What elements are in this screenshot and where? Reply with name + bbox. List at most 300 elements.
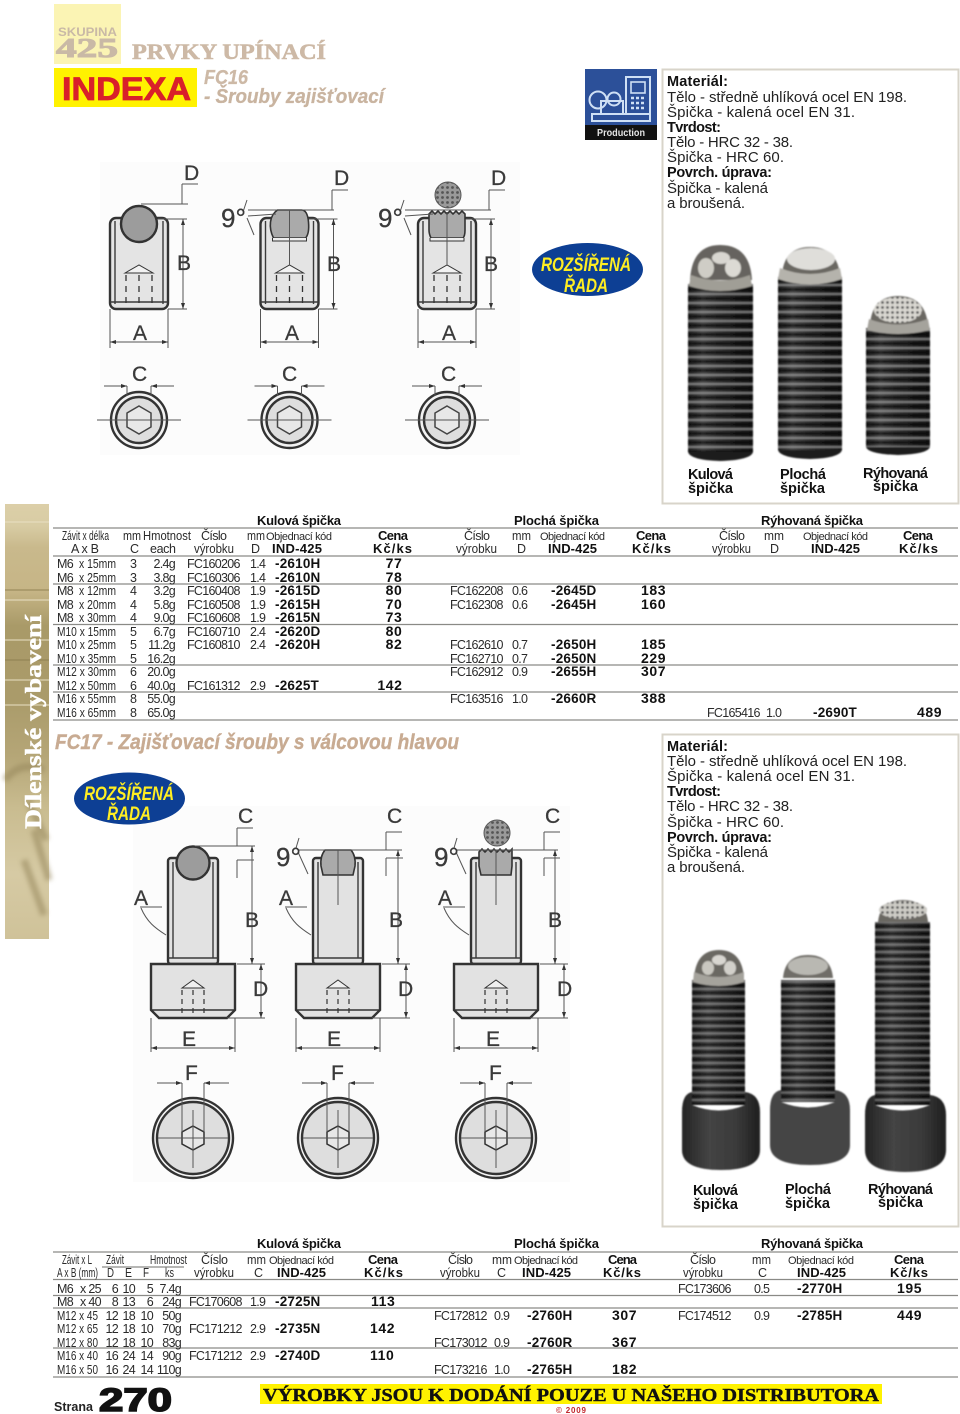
table rows: dimensions: 3.8g — [153, 571, 176, 585]
drawing: knurled tip: 9° — [378, 203, 403, 233]
captions: FC16 screws: špička — [780, 481, 826, 497]
table heading row: Kulová špička — [257, 513, 342, 528]
captions: FC17 screws: Rýhovaná — [868, 1182, 934, 1198]
panel: FC16 material and photos — [662, 70, 958, 504]
table rows: ball tip: FC171212 — [189, 1322, 243, 1336]
drawing: ball tip: D — [184, 162, 199, 185]
table rows: dimensions: M10 x 15mm — [57, 625, 116, 639]
table rows: dimensions — [57, 1282, 182, 1377]
table rows: ball tip: FC160810 — [187, 638, 241, 652]
header: group number badge: 425 — [56, 33, 118, 63]
table rows: dimensions: 2.4g — [153, 557, 176, 571]
table rows: ball tip: 113 — [371, 1293, 395, 1309]
table rows: dimensions: 14 — [140, 1363, 154, 1377]
badge: rozšířená řada FC17 — [74, 772, 185, 825]
table rows: dimensions: 5.8g — [153, 598, 176, 612]
table heading row: Kč/ks — [373, 541, 412, 556]
text block: FC17 material: Materiál: — [667, 739, 728, 755]
table rows: dimensions: 8 — [130, 692, 137, 706]
table rows: ball tip: 80 — [386, 582, 402, 598]
table rows: knurled tip: -2785H — [797, 1308, 842, 1323]
drawing: ball tip: F — [185, 1062, 198, 1085]
table rows: dimensions: M12 x 45 — [57, 1309, 98, 1323]
table rows: flat tip: 182 — [612, 1361, 637, 1377]
drawing: flat tip: A — [279, 887, 293, 910]
table rows: dimensions: 90g — [162, 1349, 182, 1363]
table rows: dimensions: 5 — [130, 638, 137, 652]
drawing: knurled tip: D — [491, 167, 506, 190]
drawing: flat tip: 9° — [276, 842, 301, 872]
table rows: dimensions: M8 — [57, 598, 74, 612]
table rows: flat tip: -2660R — [551, 691, 597, 706]
table heading row: Objednací kód — [514, 1255, 578, 1267]
table rows: dimensions: 6 — [112, 1282, 119, 1296]
table rows: dimensions: 10 — [122, 1282, 136, 1296]
table rows: dimensions: 10 — [140, 1322, 154, 1336]
table rows: flat tip: FC162710 — [450, 652, 504, 666]
table heading row: D — [770, 542, 779, 556]
table rows: dimensions: 6.7g — [153, 625, 176, 639]
table rows: dimensions: M16 x 50 — [57, 1363, 98, 1377]
table rows: ball tip: 1.9 — [250, 1295, 266, 1309]
drawing: knurled tip — [434, 805, 572, 1178]
table rows: dimensions: 6 — [130, 665, 137, 679]
distributor notice: VÝROBKY JSOU K DODÁNÍ POUZE U NAŠEHO DISTRIBUTORA — [263, 1384, 879, 1405]
table rows: ball tip: -2615D — [275, 583, 321, 598]
table rows: flat tip: 1.0 — [512, 692, 528, 706]
heading: FC16 Šrouby zajišťovací — [204, 67, 386, 108]
table rows: dimensions: 4 — [130, 598, 137, 612]
heading: FC16 Šrouby zajišťovací: - Šrouby zajišťovací — [204, 84, 386, 108]
table heading row: Rýhovaná špička — [761, 513, 864, 528]
table rows: ball tip: -2610N — [275, 570, 320, 585]
table rows: ball tip: 142 — [377, 677, 403, 693]
table rows: flat tip — [434, 1307, 637, 1377]
table rows: dimensions: 70g — [162, 1322, 182, 1336]
table heading row: Číslo — [719, 528, 745, 543]
drawing: knurled tip: 9° — [434, 842, 459, 872]
table rows: dimensions: M6 — [57, 571, 74, 585]
table rows: ball tip: FC171212 — [189, 1349, 243, 1363]
table rows: knurled tip: -2690T — [813, 705, 858, 720]
drawing: flat tip: B — [327, 253, 341, 276]
heading: FC17 Zajišťovací šrouby s válcovou hlavou: FC17 - Zajišťovací šrouby s válcovou hlavou — [55, 731, 459, 754]
table rows: dimensions: x 25 — [80, 1282, 102, 1296]
table heading row — [62, 513, 938, 556]
text block: FC17 material: Tvrdost: — [667, 784, 721, 800]
table rows: dimensions: M6 — [57, 557, 74, 571]
table rows: ball tip: 110 — [370, 1347, 394, 1363]
captions: FC16 screws: Kulová — [688, 467, 734, 483]
drawing: flat tip: F — [331, 1062, 344, 1085]
table rows: dimensions: 8 — [112, 1295, 119, 1309]
table rows: flat tip: 160 — [641, 596, 666, 612]
table rows: ball tip: -2615H — [275, 597, 320, 612]
table rows: flat tip: -2760R — [527, 1335, 573, 1350]
table heading row: Objednací kód — [269, 1255, 334, 1267]
table rows: flat tip: -2760H — [527, 1308, 572, 1323]
drawing: flat tip: 9° — [221, 203, 246, 233]
table rows: dimensions: x 20mm — [79, 598, 116, 612]
sidebar: Dílenské vybavení — [5, 504, 49, 939]
table heading row: Kč/ks — [899, 541, 938, 556]
table heading row: Cena — [378, 528, 409, 543]
table heading row: IND-425 — [797, 1265, 846, 1280]
table: FC16 — [53, 513, 958, 720]
photo: knurled tip cap screw — [865, 900, 946, 1172]
drawing: knurled tip: C — [441, 363, 456, 386]
drawing: ball tip: E — [182, 1028, 196, 1051]
table heading row: mm — [123, 529, 141, 543]
table rows: dimensions: 18 — [122, 1336, 136, 1350]
table rows: flat tip: 307 — [641, 663, 666, 679]
text block: FC16 material: Tělo - středně uhlíková ocel EN 198. — [667, 89, 907, 106]
captions: FC17 screws: špička — [878, 1195, 924, 1211]
table rows: ball tip: 73 — [386, 609, 402, 625]
table heading row: Plochá špička — [514, 1236, 600, 1251]
table rows: ball tip: 70 — [386, 596, 402, 612]
table rows: dimensions: M10 x 35mm — [57, 652, 116, 666]
table rows: flat tip: -2765H — [527, 1362, 572, 1377]
table rows: ball tip: 2.4 — [250, 638, 266, 652]
badge: rozšířená řada FC16: ŘADA — [564, 275, 608, 297]
table rows: dimensions: M8 — [57, 1295, 74, 1309]
text block: FC16 material: Špička - kalená — [667, 180, 769, 197]
text block: FC17 material: a broušená. — [667, 859, 745, 876]
table rows: dimensions: 8 — [130, 706, 137, 720]
table rows: dimensions: 16 — [105, 1363, 119, 1377]
table rows: ball tip: FC160306 — [187, 571, 241, 585]
table rows: flat tip: -2645H — [551, 597, 596, 612]
table rows: dimensions: x 30mm — [79, 611, 116, 625]
table rows: dimensions: M12 x 30mm — [57, 665, 116, 679]
table heading row: Cena — [894, 1252, 925, 1267]
table rows: dimensions: 24g — [162, 1295, 182, 1309]
table rows: flat tip: 183 — [641, 582, 666, 598]
table heading row: výrobku — [194, 1266, 234, 1280]
table rows: dimensions: 13 — [122, 1295, 136, 1309]
text block: FC16 material — [667, 74, 907, 212]
table heading row: IND-425 — [548, 541, 597, 556]
table rows: ball tip: 1.9 — [250, 584, 266, 598]
table heading row: E — [125, 1266, 132, 1280]
heading: PRVKY UPÍNACÍ: PRVKY UPÍNACÍ — [132, 39, 326, 64]
drawing: flat tip: C — [387, 805, 402, 828]
table heading row: Číslo — [448, 1252, 473, 1267]
table heading row: výrobku — [683, 1266, 723, 1280]
table heading row: Kulová špička — [257, 1236, 342, 1251]
text block: FC17 material: Špička - kalená ocel EN 31. — [667, 768, 855, 785]
table rows: ball tip: FC160608 — [187, 611, 241, 625]
table heading row: IND-425 — [522, 1265, 571, 1280]
drawing: flat tip: A — [285, 322, 299, 345]
table rows: knurled tip: -2770H — [797, 1281, 842, 1296]
table heading row: mm — [764, 529, 784, 543]
table heading row: Číslo — [464, 528, 490, 543]
table rows: dimensions: 3 — [130, 557, 137, 571]
table rows: flat tip: 388 — [641, 690, 666, 706]
table rows: knurled tip — [707, 704, 942, 720]
table rows: flat tip: FC173216 — [434, 1363, 488, 1377]
badge: rozšířená řada FC16 — [532, 243, 643, 297]
table heading row: D — [251, 542, 260, 556]
table rules — [53, 528, 958, 720]
drawing: knurled tip: A — [438, 887, 452, 910]
table heading row: výrobku — [440, 1266, 480, 1280]
drawing: knurled tip: B — [548, 909, 562, 932]
table rows: knurled tip: 195 — [897, 1280, 922, 1296]
drawing: knurled tip: F — [489, 1062, 502, 1085]
table rows: ball tip: 1.9 — [250, 611, 266, 625]
table heading row: F — [143, 1266, 149, 1280]
table rows: ball tip: 82 — [386, 636, 402, 652]
table rows: flat tip: 367 — [612, 1334, 637, 1350]
table heading row: mm — [752, 1253, 771, 1267]
logo: INDEXA: INDEXA — [62, 71, 191, 107]
table rows: ball tip: -2740D — [275, 1348, 321, 1363]
table rows: dimensions: M12 x 80 — [57, 1336, 98, 1350]
table heading row: Plochá špička — [514, 513, 600, 528]
captions: FC16 screws: špička — [688, 481, 734, 497]
table rows: flat tip: FC162208 — [450, 584, 504, 598]
table rows: knurled tip: FC174512 — [678, 1309, 732, 1323]
table rows: dimensions: 65.0g — [147, 706, 176, 720]
drawing: ball tip — [134, 805, 268, 1178]
table rows: dimensions: 4 — [130, 584, 137, 598]
table rows: ball tip: -2625T — [275, 678, 320, 693]
table heading row: C — [497, 1266, 506, 1280]
table rows: ball tip: 2.9 — [250, 1322, 266, 1336]
table rows: dimensions: x 15mm — [79, 557, 116, 571]
table heading row: each — [150, 542, 176, 556]
table rows: ball tip: FC160710 — [187, 625, 241, 639]
table heading row: Cena — [636, 528, 667, 543]
table heading row: IND-425 — [811, 541, 860, 556]
drawing: flat tip: C — [282, 363, 297, 386]
table rows: knurled tip: 489 — [917, 704, 942, 720]
captions: FC17 screws: špička — [785, 1196, 831, 1212]
table heading row: Číslo — [690, 1252, 716, 1267]
drawing: flat tip: E — [327, 1028, 341, 1051]
table heading row: Závit x L — [62, 1252, 92, 1267]
table heading row: Číslo — [201, 528, 227, 543]
captions: FC16 screws: Plochá — [780, 467, 827, 483]
table rows: flat tip: FC163516 — [450, 692, 504, 706]
badge: rozšířená řada FC17: ROZŠÍŘENÁ — [84, 783, 174, 805]
table heading row: mm — [247, 1253, 266, 1267]
table heading row: ks — [165, 1266, 174, 1280]
table rows: dimensions: M12 x 65 — [57, 1322, 98, 1336]
table rows: flat tip: 307 — [612, 1307, 637, 1323]
table: FC17 — [53, 1236, 958, 1377]
table rows: flat tip: 0.7 — [512, 638, 528, 652]
heading: FC16 Šrouby zajišťovací: FC16 — [204, 67, 249, 89]
table rows: knurled tip: 1.0 — [766, 706, 782, 720]
drawing: ball tip: D — [253, 978, 268, 1001]
table rows: flat tip: 0.9 — [512, 665, 528, 679]
table heading row: mm — [247, 529, 265, 543]
table rows: dimensions: 40.0g — [147, 679, 176, 693]
table rows: dimensions: 18 — [122, 1322, 136, 1336]
table rows: dimensions: 20.0g — [147, 665, 176, 679]
table rows: flat tip: FC172812 — [434, 1309, 488, 1323]
text block: FC17 material: Povrch. úprava: — [667, 830, 772, 846]
table rows: ball tip: FC161312 — [187, 679, 241, 693]
text block: FC16 material: Tělo - HRC 32 - 38. — [667, 134, 793, 151]
table rows: dimensions: 14 — [140, 1349, 154, 1363]
table rows: dimensions: 12 — [105, 1309, 119, 1323]
table rows: flat tip: 1.0 — [494, 1363, 510, 1377]
table rows: dimensions: M16 x 40 — [57, 1349, 98, 1363]
photo: ball tip set screw — [688, 245, 753, 461]
table rows: dimensions: 83g — [162, 1336, 182, 1350]
drawing: ball tip: C — [238, 805, 253, 828]
header: group number badge — [54, 4, 121, 64]
table rows: dimensions: 55.0g — [147, 692, 176, 706]
table heading row: Závit x délka — [62, 528, 109, 543]
captions: FC17 screws: Plochá — [785, 1182, 832, 1198]
table heading row: Hmotnost — [150, 1252, 187, 1267]
panel: FC17 material and photos — [662, 734, 958, 1226]
table rows: dimensions: x 12mm — [79, 584, 116, 598]
drawing: ball tip: B — [245, 909, 259, 932]
table rows: dimensions: M8 — [57, 611, 74, 625]
drawing: flat tip: B — [389, 909, 403, 932]
table rows: dimensions: 9.0g — [153, 611, 176, 625]
table rows: dimensions: 3.2g — [153, 584, 176, 598]
drawing: ball tip: A — [133, 322, 147, 345]
table rows: ball tip: -2610H — [275, 556, 320, 571]
text block: FC17 material — [667, 739, 907, 876]
page number: Strana — [54, 1400, 94, 1414]
table rows: ball tip: -2620D — [275, 624, 321, 639]
table rows: dimensions: 5 — [130, 625, 137, 639]
badge: rozšířená řada FC16: ROZŠÍŘENÁ — [541, 254, 631, 276]
table rows: dimensions: 24 — [122, 1363, 136, 1377]
drawing: knurled tip: B — [484, 253, 498, 276]
table rows: ball tip: FC160206 — [187, 557, 241, 571]
table rows: dimensions: 7.4g — [159, 1282, 182, 1296]
drawing: knurled tip: D — [557, 978, 572, 1001]
table rows: dimensions: 6 — [147, 1295, 154, 1309]
table heading row: Objednací kód — [540, 531, 605, 543]
text block: FC16 material: Špička - HRC 60. — [667, 149, 784, 166]
table heading row: IND-425 — [272, 541, 322, 556]
table heading row: D — [107, 1266, 114, 1280]
table heading row — [57, 1236, 928, 1280]
chart: FC16 technical drawings — [97, 162, 520, 455]
table rows: ball tip: -2615N — [275, 610, 320, 625]
table rows: ball tip: 77 — [386, 555, 402, 571]
page number — [54, 1382, 172, 1414]
table heading row: Závit — [106, 1252, 124, 1267]
table rows: dimensions: M10 x 25mm — [57, 638, 116, 652]
table rows: ball tip: 78 — [386, 569, 402, 585]
icon: production machine: Production — [597, 128, 645, 139]
chart: FC17 technical drawings — [133, 805, 572, 1182]
table heading row: C — [254, 1266, 263, 1280]
table rows: flat tip — [450, 582, 666, 706]
table rows: dimensions: 5 — [147, 1282, 154, 1296]
table rows: ball tip: FC170608 — [189, 1295, 243, 1309]
table rows: flat tip: FC173012 — [434, 1336, 488, 1350]
table rows: dimensions — [57, 557, 176, 720]
text block: FC16 material: a broušená. — [667, 195, 745, 212]
table heading row: C — [758, 1266, 767, 1280]
table rows: knurled tip: 449 — [897, 1307, 922, 1323]
table heading row: Kč/ks — [632, 541, 671, 556]
table heading row: C — [130, 542, 139, 556]
table rows: dimensions: 4 — [130, 611, 137, 625]
table rows: dimensions: x 25mm — [79, 571, 116, 585]
table rows: ball tip: FC160508 — [187, 598, 241, 612]
table rows: ball tip: FC160408 — [187, 584, 241, 598]
table rows: flat tip: -2645D — [551, 583, 597, 598]
table rows: dimensions: M16 x 65mm — [57, 706, 116, 720]
table rows: knurled tip: FC165416 — [707, 706, 761, 720]
table rows: flat tip: 0.6 — [512, 584, 528, 598]
table rows: ball tip — [187, 555, 403, 693]
table rows: flat tip: -2655H — [551, 664, 596, 679]
table heading row: výrobku — [194, 542, 234, 556]
photo: flat tip set screw — [778, 247, 842, 459]
table rows: ball tip: 80 — [386, 623, 402, 639]
table rows: ball tip: -2725N — [275, 1294, 320, 1309]
table rows: flat tip: FC162912 — [450, 665, 504, 679]
table rows: dimensions: x 40 — [80, 1295, 102, 1309]
table rows: knurled tip: 0.5 — [754, 1282, 770, 1296]
table rows: flat tip: 185 — [641, 636, 666, 652]
table heading row: D — [517, 542, 526, 556]
drawing: knurled tip: C — [545, 805, 560, 828]
drawing: ball tip: A — [134, 887, 148, 910]
text block: FC17 material: Špička - kalená — [667, 844, 769, 861]
table rows: dimensions: 6 — [130, 679, 137, 693]
table rows: dimensions: M16 x 55mm — [57, 692, 116, 706]
table rows: ball tip — [189, 1293, 395, 1363]
table rows: flat tip: 0.7 — [512, 652, 528, 666]
photo: ball tip cap screw — [682, 950, 760, 1170]
table rows: ball tip: -2735N — [275, 1321, 320, 1336]
table rows: ball tip: 1.4 — [250, 557, 266, 571]
table heading row: Číslo — [201, 1252, 228, 1267]
drawing: knurled tip — [378, 167, 506, 448]
table rows: ball tip: 2.9 — [250, 679, 266, 693]
captions: FC17 screws — [693, 1182, 934, 1213]
table heading row: Hmotnost — [143, 529, 191, 543]
table rows: ball tip: -2620H — [275, 637, 320, 652]
drawing: ball tip: C — [132, 363, 147, 386]
table rows: dimensions: 16.2g — [147, 652, 176, 666]
table rows: knurled tip: 0.9 — [754, 1309, 770, 1323]
table rows: ball tip: 1.4 — [250, 571, 266, 585]
captions: FC16 screws: Rýhovaná — [863, 466, 929, 482]
icon: production machine — [585, 69, 657, 140]
table rows: flat tip: 0.9 — [494, 1336, 510, 1350]
drawing: flat tip — [276, 805, 413, 1178]
table rows: dimensions: 11.2g — [148, 638, 176, 652]
table rows: dimensions: 5 — [130, 652, 137, 666]
table rows: dimensions: 10 — [140, 1309, 154, 1323]
table heading row: mm — [492, 1253, 512, 1267]
table rows: dimensions: 110g — [157, 1363, 182, 1377]
sidebar: Dílenské vybavení: Dílenské vybavení — [21, 614, 46, 829]
drawing: ball tip: B — [177, 252, 191, 275]
captions: FC16 screws: špička — [873, 479, 919, 495]
captions: FC17 screws: špička — [693, 1197, 739, 1213]
table rows: dimensions: 16 — [105, 1349, 119, 1363]
drawing: flat tip: D — [334, 167, 349, 190]
